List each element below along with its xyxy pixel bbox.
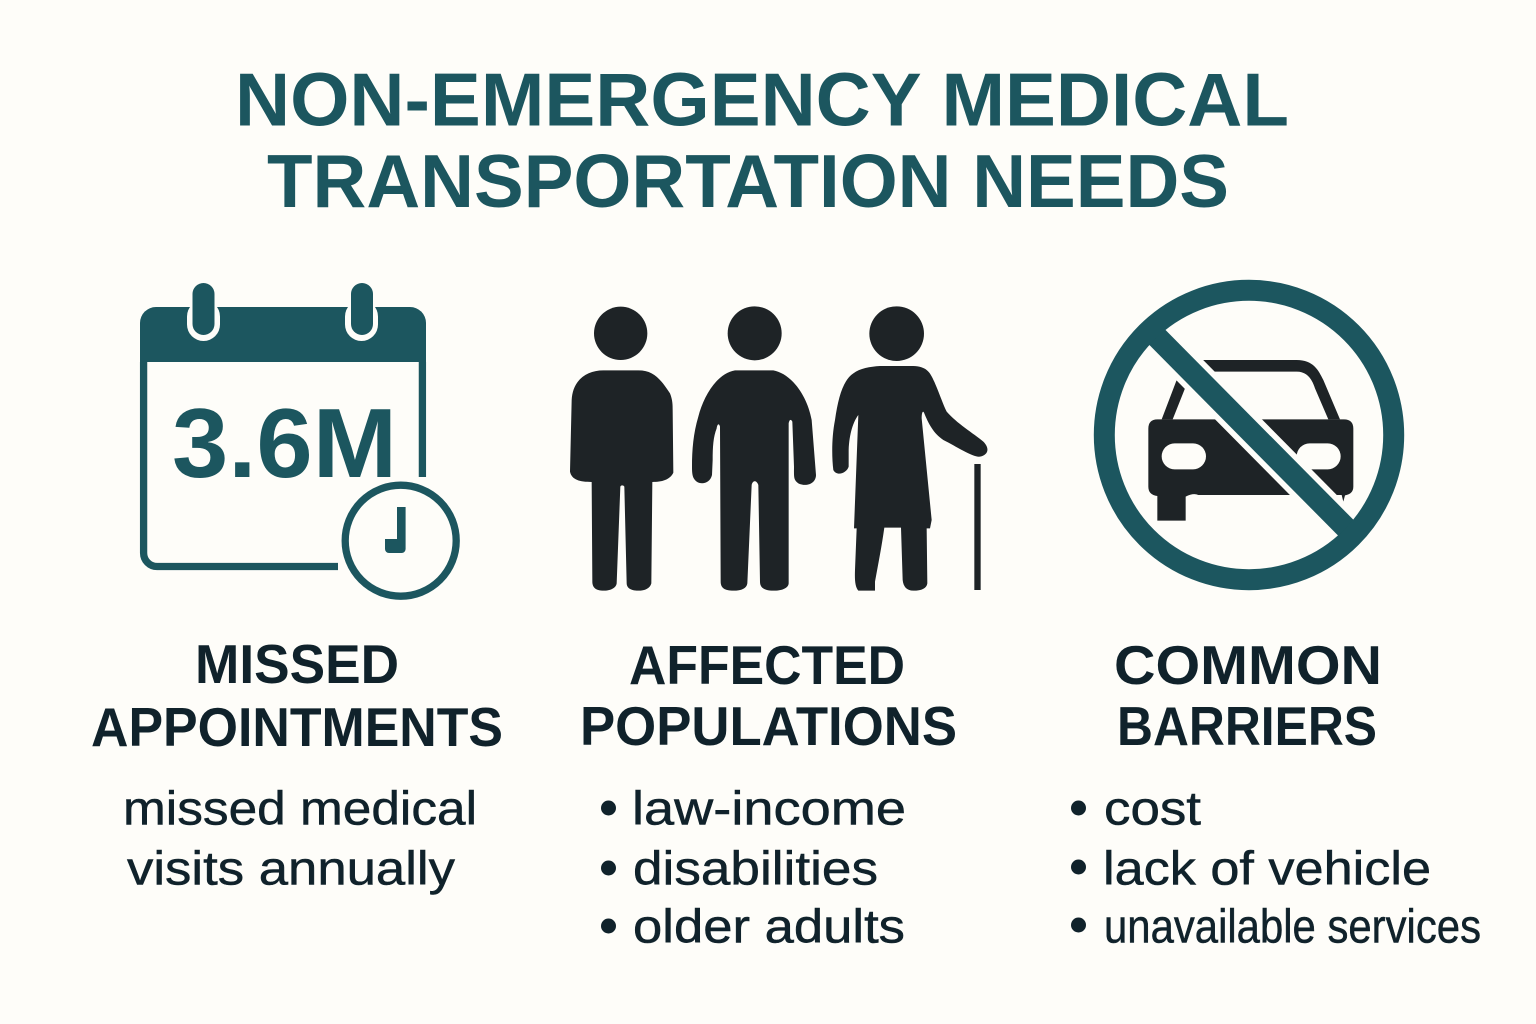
text: missed medical visits annually	[123, 782, 477, 894]
heading: affected populations: AFFECTED	[629, 634, 905, 696]
car	[1148, 360, 1353, 521]
list: common barriers	[1071, 782, 1481, 952]
panel: affected populations	[570, 306, 987, 953]
list: common barriers: lack of vehicle	[1103, 842, 1431, 894]
panel: missed appointments	[91, 283, 503, 894]
icon: no car prohibition sign	[1104, 290, 1394, 580]
heading: common barriers: COMMON	[1114, 634, 1382, 696]
list: affected populations: older adults	[633, 900, 905, 952]
person 2	[692, 306, 816, 591]
text: missed medical visits annually: visits annually	[127, 842, 456, 894]
title	[235, 58, 1289, 223]
list: common barriers: cost	[1104, 782, 1201, 834]
heading: missed appointments: APPOINTMENTS	[91, 696, 503, 758]
heading: affected populations	[580, 634, 957, 757]
person 3: older adult	[832, 306, 987, 591]
slash gap	[1157, 337, 1346, 528]
list: affected populations: law-income	[632, 782, 906, 834]
calendar number: 3.6M	[172, 388, 397, 498]
cane	[974, 464, 981, 590]
heading: common barriers	[1114, 634, 1382, 757]
list: affected populations	[601, 782, 906, 952]
heading: missed appointments: MISSED	[195, 633, 399, 695]
icon: three people with cane	[570, 306, 987, 591]
text: missed medical visits annually: missed medical	[123, 782, 477, 834]
person 1	[570, 307, 673, 591]
heading: affected populations: POPULATIONS	[580, 695, 957, 757]
title: TRANSPORTATION NEEDS	[267, 139, 1229, 223]
ring	[1104, 290, 1394, 580]
icon: calendar with clock	[140, 283, 456, 596]
panel: common barriers	[1071, 290, 1481, 952]
title: NON-EMERGENCY MEDICAL	[235, 58, 1289, 142]
clock	[345, 485, 456, 596]
slash	[1152, 332, 1351, 533]
list: affected populations: disabilities	[633, 842, 878, 894]
list: common barriers: unavailable services	[1104, 900, 1481, 952]
heading: missed appointments	[91, 633, 503, 758]
heading: common barriers: BARRIERS	[1117, 695, 1377, 757]
